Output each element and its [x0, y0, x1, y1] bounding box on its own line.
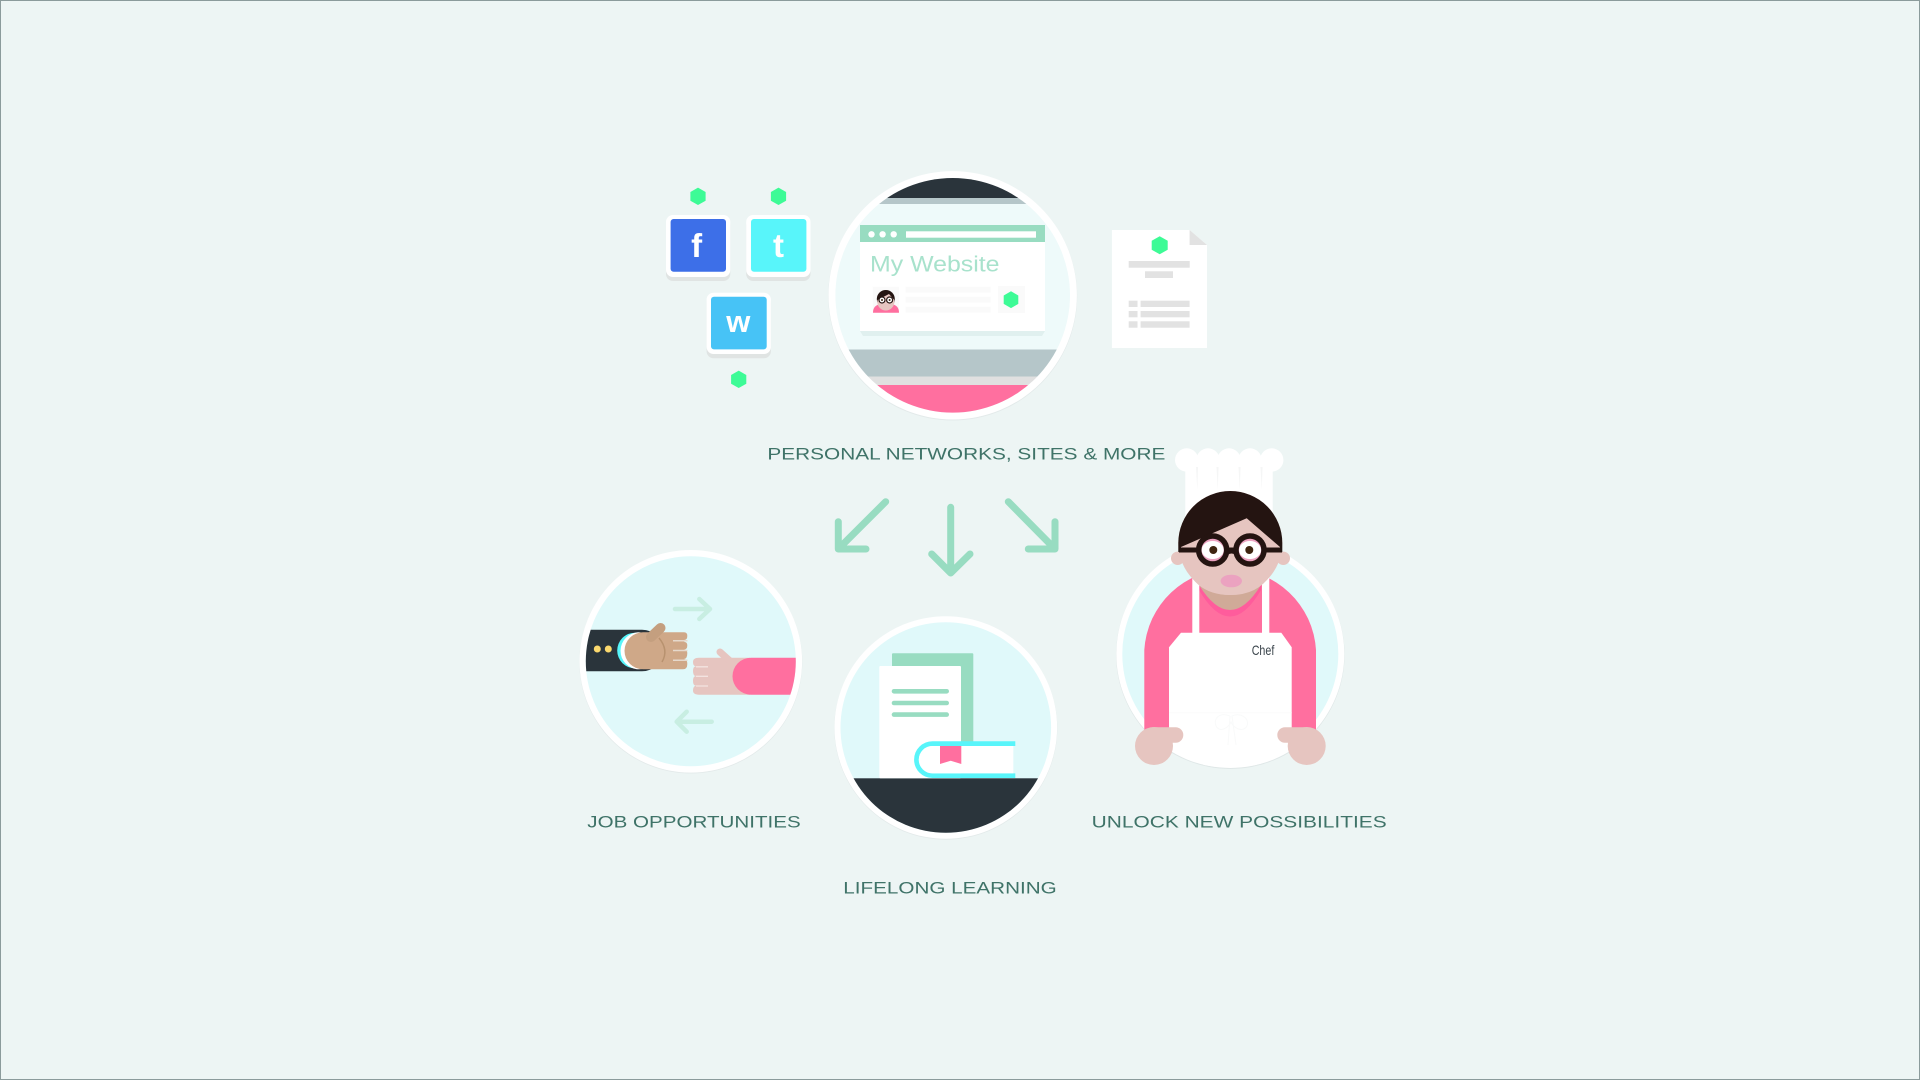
icon: chef body — [1144, 569, 1316, 730]
icon: w tile — [707, 293, 771, 358]
icon: book with bookmark — [916, 744, 1015, 776]
icon: chef head — [1178, 491, 1282, 595]
icon: resume document — [1112, 230, 1207, 348]
panel: chef circle — [1116, 448, 1345, 769]
arrow: faint right — [675, 599, 710, 619]
icon: lips — [1221, 575, 1242, 587]
icon: chef character — [1135, 448, 1326, 768]
icon: right hand — [1277, 727, 1326, 765]
arrow: faint left — [677, 712, 712, 732]
arrow: down left — [838, 502, 886, 549]
text: my website heading: My Website — [870, 252, 1000, 276]
icon: chef hat — [1175, 448, 1283, 530]
icon: social network cluster — [666, 188, 810, 388]
icon: left hand — [1135, 727, 1183, 765]
arrow: down right — [1008, 502, 1055, 549]
icon: dark sleeve hand — [580, 628, 688, 671]
icon: pink sleeve hand — [693, 652, 800, 695]
icon: green hexagon below w tile — [731, 371, 746, 388]
panel: job opportunities circle — [579, 550, 802, 774]
icon: twitter tile: t — [773, 227, 784, 264]
heading: job opportunities label: JOB OPPORTUNITIES — [587, 813, 801, 832]
icon: green hexagon above facebook — [690, 188, 706, 205]
icon: facebook tile: f — [691, 227, 703, 264]
heading: lifelong learning label: LIFELONG LEARNING — [843, 879, 1057, 898]
icon: hexagon badge — [1004, 291, 1018, 308]
icon: w tile: w — [725, 304, 751, 339]
panel: browser window — [860, 225, 1045, 336]
icon: facebook tile — [666, 215, 730, 281]
icon: green hexagon above twitter — [771, 188, 786, 205]
panel: lifelong learning circle — [834, 616, 1057, 840]
icon: apron — [1169, 633, 1292, 768]
icon: glasses — [1199, 536, 1264, 564]
heading: personal networks label: PERSONAL NETWORKS, SITES & MORE — [767, 444, 1165, 463]
arrow: down — [932, 507, 970, 573]
icon: small avatar — [873, 287, 899, 313]
panel: website circle — [828, 170, 1080, 420]
icon: ears — [1171, 552, 1290, 565]
icon: twitter tile — [746, 215, 810, 281]
text: chef name tag: Chef — [1252, 642, 1274, 658]
heading: unlock new possibilities label: UNLOCK NEW POSSIBILITIES — [1092, 813, 1387, 832]
icon: document stack — [879, 653, 973, 778]
